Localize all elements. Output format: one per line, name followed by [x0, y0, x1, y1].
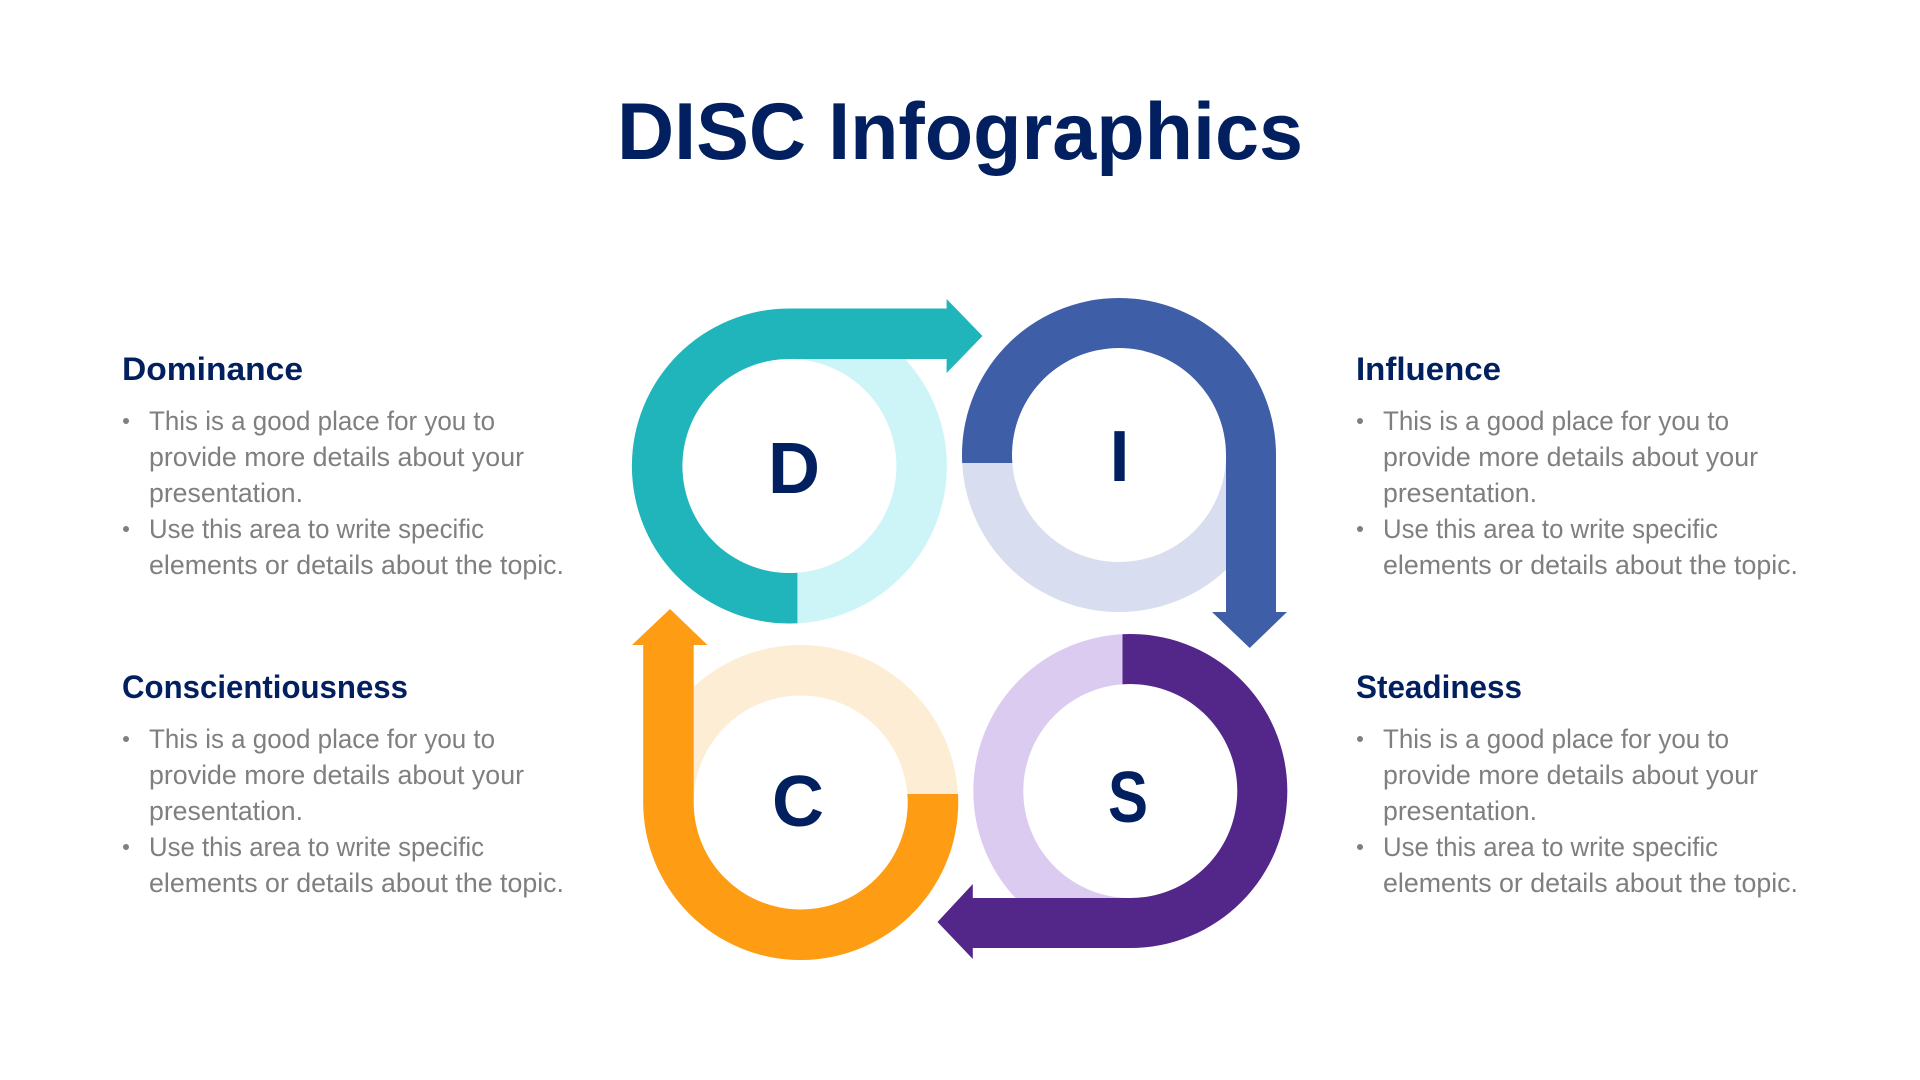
bullet list: Influence: provide more details about your	[1383, 442, 1758, 472]
bullet list: Influence	[1357, 406, 1798, 580]
bullet list: Dominance: provide more details about your	[149, 442, 524, 472]
bullet list: Steadiness: This is a good place for you to	[1383, 724, 1729, 754]
bullet list: Conscientiousness	[123, 724, 564, 898]
segment: D ring with arrow	[632, 299, 982, 624]
heading: Conscientiousness: Conscientiousness	[122, 669, 408, 705]
bullet list: Dominance: This is a good place for you to	[149, 406, 495, 436]
segment: S ring with arrow	[938, 634, 1287, 959]
diagram: DISC cycle	[632, 298, 1287, 960]
segment: S ring with arrow: S	[1108, 758, 1148, 838]
bullet list: Dominance	[123, 406, 564, 580]
segment: I ring with arrow: I	[1109, 417, 1130, 497]
panel: Steadiness text	[1356, 669, 1798, 898]
bullet list: Influence: This is a good place for you to	[1383, 406, 1729, 436]
bullet list: Steadiness: presentation.	[1383, 796, 1537, 826]
bullet list: Influence: presentation.	[1383, 478, 1537, 508]
bullet list: Conscientiousness: elements or details about the topic.	[149, 868, 564, 898]
bullet list: Steadiness: elements or details about the topic.	[1383, 868, 1798, 898]
panel: Conscientiousness text	[122, 669, 564, 898]
bullet list: Conscientiousness: presentation.	[149, 796, 303, 826]
segment: D ring with arrow: D	[768, 429, 820, 509]
bullet list: Influence: elements or details about the topic.	[1383, 550, 1798, 580]
bullet list: Conscientiousness: provide more details about your	[149, 760, 524, 790]
segment: C ring with arrow: C	[772, 762, 824, 842]
segment: I ring with arrow	[962, 298, 1287, 648]
bullet list: Dominance: elements or details about the topic.	[149, 550, 564, 580]
bullet list: Dominance: Use this area to write specific	[149, 514, 484, 544]
segment: C ring with arrow	[632, 609, 958, 960]
bullet list: Steadiness: Use this area to write specific	[1383, 832, 1718, 862]
panel: Influence text	[1356, 351, 1798, 580]
bullet list: Dominance: presentation.	[149, 478, 303, 508]
bullet list: Influence: Use this area to write specific	[1383, 514, 1718, 544]
bullet list: Steadiness: provide more details about your	[1383, 760, 1758, 790]
heading: Dominance: Dominance	[122, 351, 303, 387]
title: DISC Infographics	[617, 87, 1303, 177]
heading: Influence: Influence	[1356, 351, 1501, 387]
bullet list: Conscientiousness: Use this area to write specific	[149, 832, 484, 862]
bullet list: Steadiness	[1357, 724, 1798, 898]
heading: Steadiness: Steadiness	[1356, 669, 1522, 705]
bullet list: Conscientiousness: This is a good place for you to	[149, 724, 495, 754]
panel: Dominance text	[122, 351, 564, 580]
